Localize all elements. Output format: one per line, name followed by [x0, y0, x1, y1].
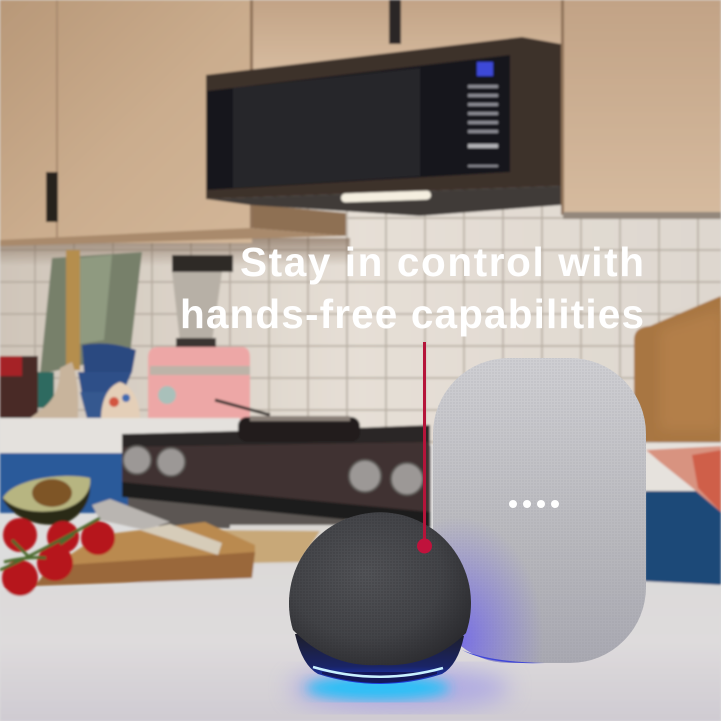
stove — [122, 425, 430, 528]
right back counter and cabinet — [630, 443, 721, 591]
headline — [180, 239, 644, 337]
backsplash tile wall — [0, 205, 721, 445]
counter gap behind stove — [128, 492, 345, 532]
headline: Stay in control with — [240, 239, 644, 285]
headline: hands-free capabilities — [180, 291, 644, 337]
back counter — [0, 418, 240, 513]
smart speaker: fabric tower — [433, 358, 646, 663]
dish towel — [646, 446, 721, 512]
blender top and art — [40, 250, 233, 374]
avocado — [3, 476, 90, 525]
pointer line with dot — [417, 342, 432, 554]
pink stand mixer — [148, 347, 250, 426]
back cutting board — [205, 530, 320, 563]
cutting board — [35, 522, 255, 586]
wood board on right — [634, 296, 721, 442]
microwave — [206, 37, 561, 216]
pan on stove — [215, 400, 360, 442]
smart speaker: dark sphere with blue ring — [289, 512, 510, 710]
microwave keypad — [468, 62, 498, 167]
tomatoes — [0, 518, 115, 596]
speaker LED dots — [509, 500, 559, 508]
microwave under light — [341, 190, 431, 203]
shelf items: basket, statue, bowls, vase — [0, 343, 140, 422]
upper wood cabinets — [0, 0, 721, 246]
stove knobs — [123, 446, 423, 495]
knife — [92, 499, 222, 555]
foreground counter — [0, 562, 721, 721]
